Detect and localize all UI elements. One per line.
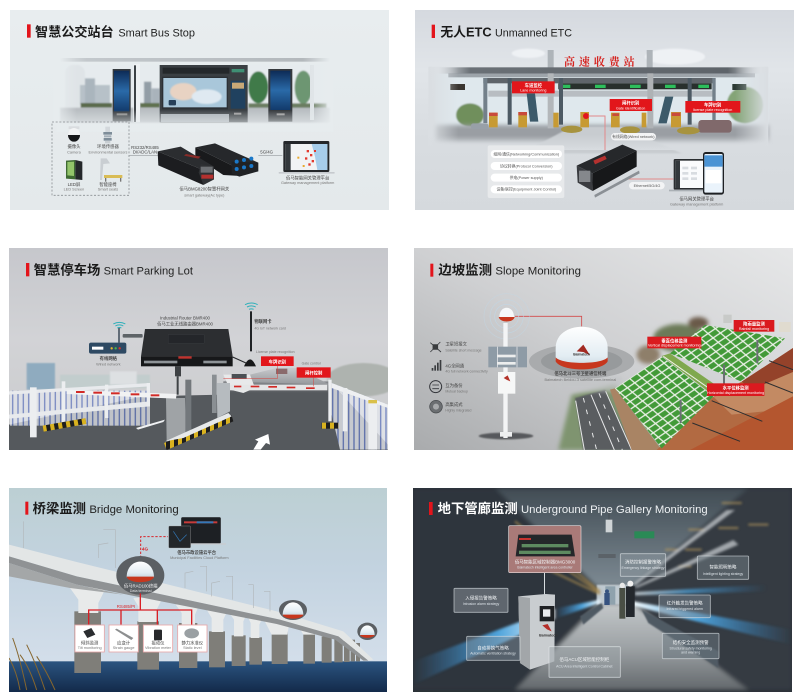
panel: unmanned ETC [415, 10, 794, 210]
functions card: 设备/联控(Equipment Joint Control) [496, 187, 557, 192]
card: intelligent lighting [697, 556, 749, 579]
terminal label [544, 370, 616, 382]
cloud platform laptop [169, 517, 226, 548]
slope scene [558, 315, 793, 450]
heading: smart parking lot: Smart Parking Lot [104, 266, 193, 278]
label: rainfall [734, 320, 774, 332]
panel: smart parking lot [9, 248, 400, 450]
gateway label: smart gateway(Ac type) [184, 194, 225, 198]
4G dashed link [141, 537, 168, 558]
platform label: Municipal Facilities Cloud Platform [170, 556, 229, 560]
label: licence plate recognition [685, 101, 740, 113]
card: ACU cabinet [549, 647, 620, 677]
monitoring pole [479, 294, 533, 439]
sensors dashed box [52, 122, 129, 195]
card: infrared alarm [659, 595, 710, 618]
gateway label: 佰马BMG8200智慧杆网关 [179, 186, 230, 193]
card: intelligent lighting: 智能照明策略 [710, 564, 737, 571]
platform label: Gateway management platform [281, 181, 334, 185]
heading: unmanned ETC: 无人ETC [440, 24, 492, 39]
card: ventilation: Automatic ventilation strategy [470, 651, 516, 655]
gate control callout: Gate control [302, 361, 321, 365]
main dome terminal: Data terminal [130, 589, 152, 593]
sensors dashed box: Smart seats [98, 187, 118, 191]
card: fire alarm: Emergency linkage strategy [621, 566, 665, 570]
heading: unmanned ETC: Unmanned ETC [495, 27, 572, 39]
platform label [670, 196, 723, 206]
icon: LED screen [66, 160, 82, 180]
feature: highly integrated: 高集成式 [445, 401, 463, 408]
sensor card: tilt [75, 625, 104, 652]
sensor card: static level: 静力水准仪 [182, 639, 204, 646]
sensors dashed box: 环境传感器 [97, 143, 119, 150]
sensor card: strain gauge: Strain gauge [113, 646, 135, 650]
feature: mutual backup: 互为备份 [445, 382, 463, 389]
4G antenna [233, 311, 256, 366]
functions card: 协议转换(Protocol Conversion) [500, 163, 553, 168]
feature: 4G connectivity [432, 360, 488, 374]
sensors dashed box: 智能座椅 [99, 181, 117, 188]
label: vertical displacement: 垂直位移监测 [661, 337, 688, 344]
label: horizontal displacement [707, 383, 764, 396]
terminal label: Baimatech Beidou-3 satellite com-terminal [544, 378, 616, 382]
controller callout: Baimatech intelligent area controller [517, 566, 574, 570]
label: rainfall: 降雨量监测 [743, 321, 765, 328]
label: licence plate recognition: 车牌识别 [704, 101, 722, 108]
feature: mutual backup: Mutual backup [445, 390, 468, 394]
IoT card label: 物联网卡 [254, 318, 272, 325]
sensors dashed box: LED Screen [64, 187, 84, 191]
label: gate identification: 闸杆识别 [622, 100, 640, 107]
icon: smart seat [100, 158, 122, 182]
card: intrusion alarm: Intrusion alarm strategy [463, 602, 499, 606]
card: ventilation [467, 636, 520, 660]
card: structural safety: and warning [681, 651, 700, 655]
platform label: Gateway management platform [670, 202, 723, 206]
heading: underground gallery: 地下管廊监测 [438, 501, 518, 516]
panel: smart bus stop [10, 10, 389, 210]
label: lane monitoring: Lane monitoring [520, 89, 546, 93]
heading: slope monitoring: Slope Monitoring [495, 266, 581, 278]
controller callout: 佰马智能区域控制器BMG3000 [515, 558, 576, 565]
platform label: 佰马市政设施云平台 [177, 549, 217, 556]
plate recognition callout: 车牌识别 [269, 358, 287, 365]
feature: 4G connectivity: 4G full network connectivity [445, 370, 488, 374]
icon: environmental sensor [103, 127, 112, 143]
wired network label: 有线网络 [100, 355, 118, 362]
terminal label: 佰马北斗三号卫星通信终端 [554, 370, 607, 377]
heading: smart bus stop: 智慧公交站台 [35, 24, 114, 39]
wired network label: Wired network [96, 363, 121, 367]
link line [515, 316, 582, 326]
platform label: 佰马智能网关管理平台 [286, 175, 329, 182]
heading: smart bus stop: Smart Bus Stop [118, 27, 195, 39]
sensor card: vibration meter: Vibration meter [145, 646, 172, 650]
RS485 wiring [89, 593, 192, 625]
feature: mutual backup [430, 381, 468, 394]
feature: satellite short message [430, 340, 482, 352]
feature: 4G connectivity: 4G全网通 [445, 363, 465, 370]
station name: 高速收费站 [564, 55, 635, 69]
tunnel scene [413, 488, 792, 690]
card: structural safety [662, 633, 719, 659]
sensors dashed box: Environmental sensors [89, 150, 128, 154]
IoT card label [254, 318, 286, 330]
router label: Industrial Router BMR400 [160, 315, 210, 320]
connection line with protocols: DI/ADC/LAN [133, 150, 157, 155]
card: intelligent lighting: Intelligent lighting strategy [703, 572, 743, 576]
functions card: 组网/通信(Networking/Communication) [493, 151, 560, 156]
main dome terminal: 佰马RAD100终端 [124, 582, 158, 589]
label: lane monitoring: 车道监控 [525, 82, 543, 89]
sensor card: tilt: Tilt monitoring [78, 646, 102, 650]
panel: underground pipe gallery [413, 488, 792, 692]
connection line with protocols: RS232/RS485 [131, 145, 159, 150]
panel: slope monitoring [414, 248, 793, 450]
heading: bridge monitoring [25, 501, 179, 516]
pill: ethernet: Ethernet/5G/4G [634, 184, 660, 188]
barrier arm: entry [230, 385, 327, 390]
card: ventilation: 自动排换气策略 [477, 644, 509, 651]
heading: underground gallery: Underground Pipe Gallery Monitoring [521, 504, 708, 516]
gateway device [577, 145, 640, 198]
link and 5G label: 5G/4G [260, 149, 274, 154]
barrier arm: exit [67, 390, 177, 399]
router label [157, 316, 213, 326]
pill: wired network: 有线网络(Wired network) [612, 134, 655, 139]
card: structural safety: 结构安全监测预警 [673, 639, 709, 646]
sensors dashed box: 摄像头 [68, 143, 81, 150]
connection line with protocols [129, 145, 160, 156]
heading: bridge monitoring: 桥梁监测 [33, 501, 86, 516]
heading: smart parking lot: 智慧停车场 [34, 263, 100, 278]
icon: wifi left [113, 322, 125, 328]
heading: slope monitoring [430, 263, 581, 278]
connector line [544, 573, 545, 596]
main dome terminal [116, 556, 164, 595]
label: horizontal displacement: Horizontal displacement monitoring [707, 391, 764, 395]
link and 5G label [258, 149, 282, 156]
feature: highly integrated [430, 400, 472, 413]
platform label [281, 175, 334, 185]
gateway label [179, 186, 230, 198]
sensor card: static level [178, 625, 207, 652]
icon: wifi right [245, 303, 258, 309]
large satellite terminal [529, 327, 634, 379]
sensor card: tilt: 倾斜监测 [81, 639, 99, 646]
bridge scene [9, 521, 387, 692]
card: structural safety: Structural safety monitoring [669, 646, 712, 650]
platform label [170, 549, 229, 560]
red connection lines [588, 116, 673, 179]
label: lane monitoring [512, 81, 555, 93]
RS485 label: RS485/PI [117, 604, 135, 609]
control cabinet [518, 594, 558, 670]
router label: 佰马工业无线路由器BMR400 [157, 321, 213, 328]
laptop and phone platform [669, 152, 724, 195]
plate recognition callout: License plate recognition [256, 350, 295, 354]
controller callout [509, 526, 581, 573]
panel: bridge monitoring [9, 488, 387, 692]
gate control callout: 闸杆控制 [305, 370, 323, 377]
heading: underground gallery [429, 501, 708, 516]
label: gate identification [610, 99, 652, 111]
card: ACU cabinet: ACU Area intelligent Control Cabinet [556, 664, 613, 668]
IoT card label: 4G IoT network card [254, 326, 286, 330]
icon: camera [68, 126, 80, 142]
sensor card: vibration meter [143, 625, 173, 652]
pill: wired network [611, 133, 656, 140]
far dome terminal [357, 623, 377, 640]
side dome terminal [279, 600, 307, 620]
card: infrared alarm: Infrared triggered alarm [666, 607, 703, 611]
platform label: 佰马网关管理平台 [679, 196, 714, 203]
card: intrusion alarm [454, 588, 508, 612]
wired network label [96, 356, 120, 366]
large satellite terminal: Baimatech [573, 352, 590, 356]
card: infrared alarm: 红外触发告警策略 [667, 600, 703, 607]
card: fire alarm: 消防控制报警策略 [625, 558, 661, 565]
plate recognition callout [223, 350, 295, 379]
functions card [488, 145, 564, 198]
bus shelter scene [60, 58, 328, 122]
card: ACU cabinet: 佰马ACU区域智能控制柜 [559, 656, 610, 663]
router device [123, 329, 233, 395]
heading: slope monitoring: 边坡监测 [438, 263, 492, 278]
card: intrusion alarm: 入侵报告警策略 [465, 594, 497, 601]
heading: smart parking lot [26, 263, 193, 278]
feature: satellite short message: 卫星短报文 [445, 340, 468, 347]
sensor card: static level: Static level [183, 646, 202, 650]
sensors dashed box: LED屏 [68, 182, 81, 188]
functions card: 供电(Power supply) [510, 175, 544, 180]
heading: smart bus stop [27, 24, 195, 39]
heading: bridge monitoring: Bridge Monitoring [89, 504, 179, 516]
pill: ethernet [629, 182, 665, 189]
sensor card: vibration meter: 振动仪 [152, 639, 165, 646]
label: gate identification: Gate identification [616, 106, 645, 110]
label: licence plate recognition: license plate recognition [693, 108, 732, 112]
card: fire alarm [620, 554, 666, 576]
sensor card: strain gauge: 应变计 [117, 639, 131, 646]
sensors dashed box: Camera [67, 150, 82, 154]
gateway devices [158, 143, 258, 185]
label: rainfall: Rainfall monitoring [739, 327, 769, 331]
wired network modem [89, 328, 126, 354]
sensor card: strain gauge [109, 625, 138, 652]
heading: unmanned ETC [432, 24, 572, 38]
control cabinet: Baimatech [539, 634, 558, 638]
toll station scene [428, 49, 772, 153]
laptop management platform [279, 141, 335, 174]
feature: satellite short message: Satellite short message [445, 348, 482, 352]
parking scene background [9, 363, 400, 450]
gate control callout [297, 361, 331, 386]
label: vertical displacement [647, 337, 701, 348]
feature: highly integrated: Highly integrated [445, 409, 472, 413]
label: horizontal displacement: 水平位移监测 [723, 384, 749, 391]
label: vertical displacement: Vertical displacement monitoring [648, 344, 701, 348]
4G dashed link: 4G [142, 546, 148, 551]
